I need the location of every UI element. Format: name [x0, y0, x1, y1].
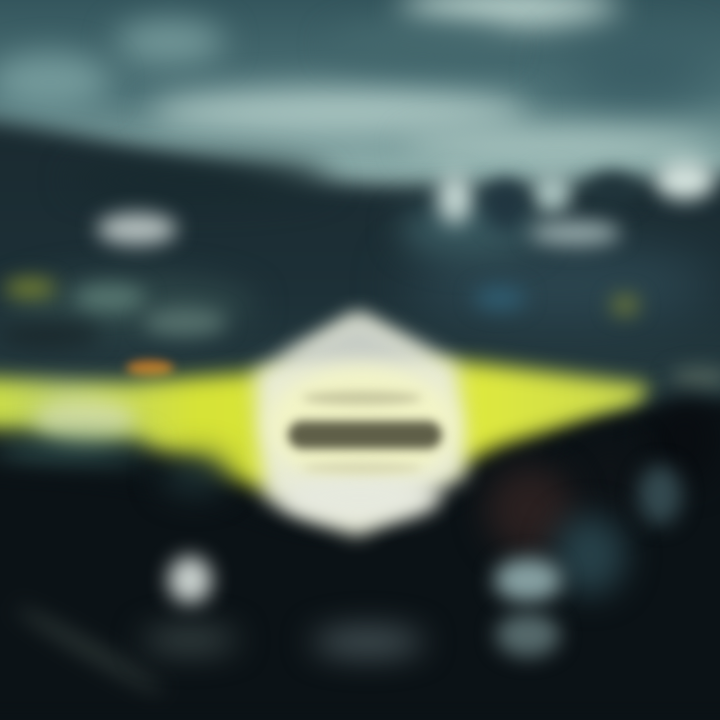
panel: dark hillside and stands	[0, 112, 720, 410]
badge inner glow	[266, 367, 458, 483]
blurred stat block: bottom left	[142, 556, 238, 652]
central hexagon badge	[254, 312, 466, 536]
panel: lower crowd silhouettes	[0, 395, 720, 720]
blurred text block: upper right	[529, 220, 621, 246]
blurred text block: upper left	[97, 213, 177, 245]
panel: yellow banner band	[0, 362, 720, 488]
badge main title blur	[288, 421, 442, 449]
coloured crowd lights	[0, 279, 639, 376]
badge subtitle blur	[302, 462, 422, 474]
blurred stat block: bottom right	[494, 558, 562, 657]
panel: stormy sky	[0, 0, 720, 230]
blurred stat block: bottom centre	[312, 628, 424, 656]
badge lower panel	[280, 474, 440, 522]
stadium towers and upper lights	[437, 160, 715, 231]
badge heading blur	[302, 391, 422, 405]
